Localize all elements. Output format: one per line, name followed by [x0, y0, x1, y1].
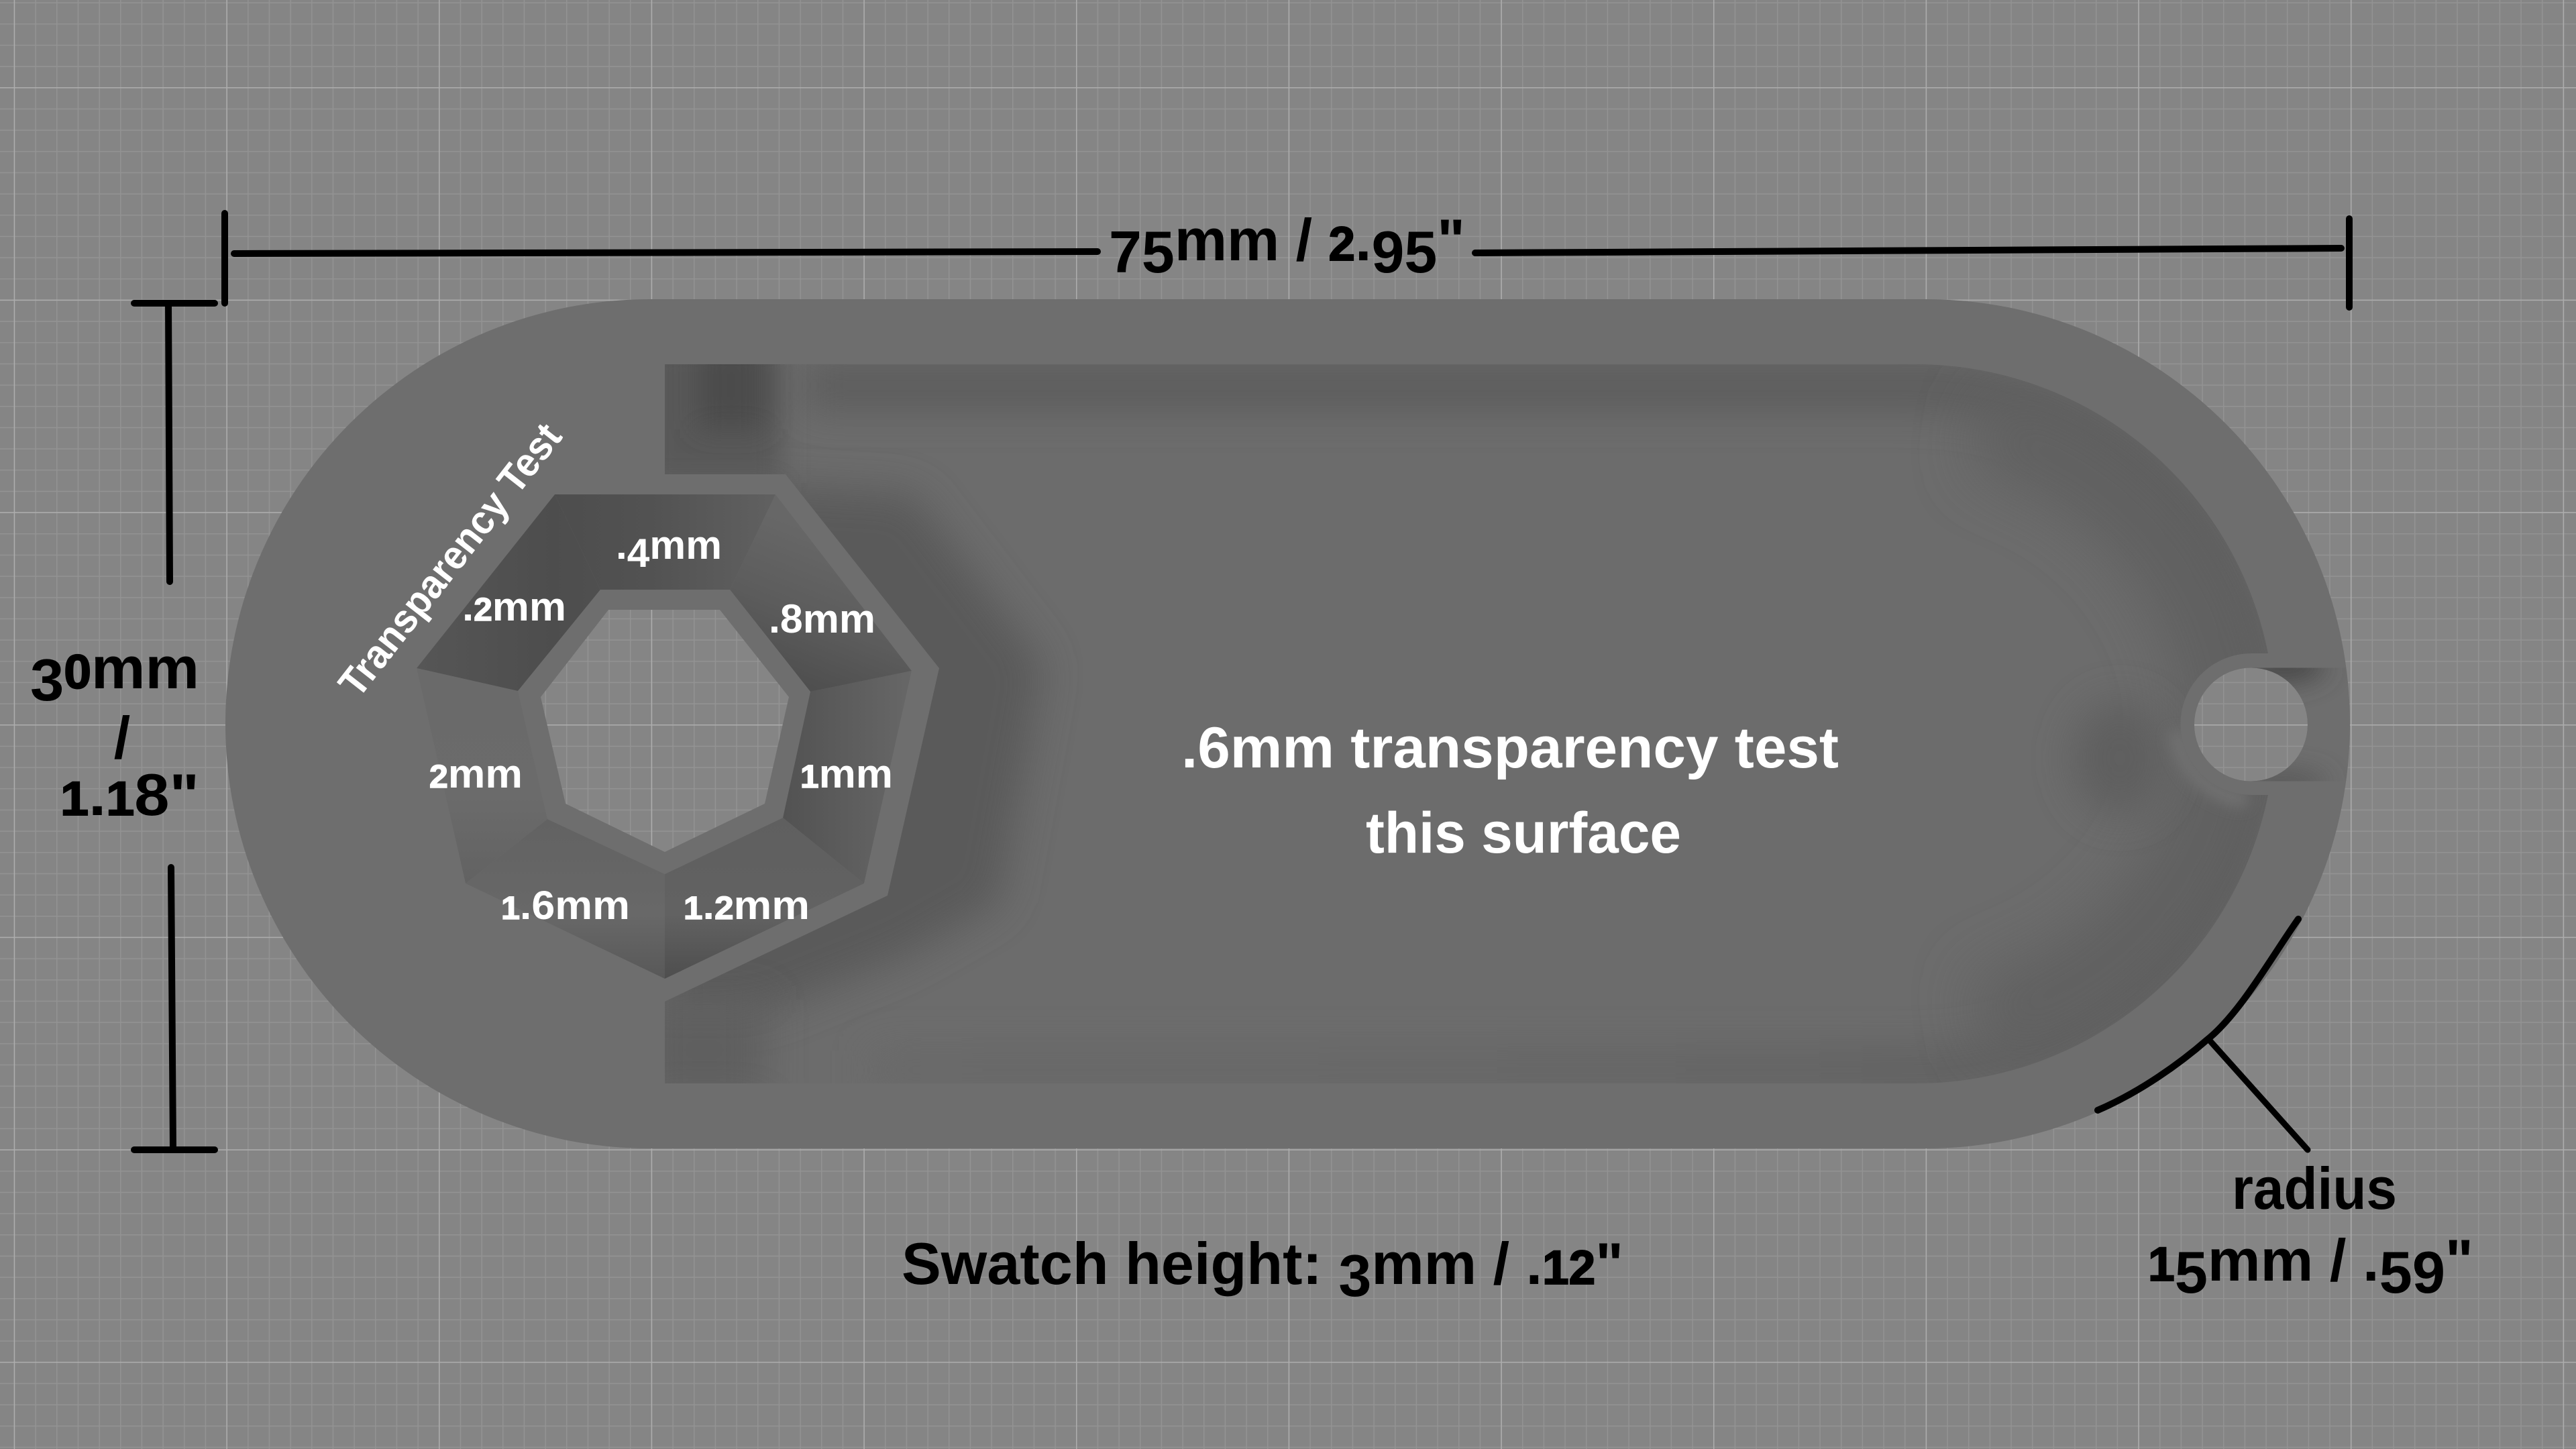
radius label line 1: radius: [2232, 1155, 2397, 1222]
height label line 2: 1.18": [60, 761, 199, 828]
shade left of key ring: [2080, 711, 2153, 805]
width label: 75: [1109, 219, 1175, 285]
width label: mm /: [1175, 207, 1329, 273]
label .8mm: .8mm: [769, 596, 875, 641]
top and right soft shadow: [810, 364, 2014, 412]
swatch height note: mm / .: [1371, 1230, 1542, 1297]
radius label line 2: 1: [2148, 1238, 2175, 1291]
label .4mm: 4: [627, 531, 650, 576]
wedge labels: [429, 523, 893, 928]
wedge .2mm: [417, 494, 600, 691]
radius arc: [2098, 919, 2298, 1110]
label .2mm: .2mm: [462, 584, 566, 629]
main recessed surface: [644, 342, 2268, 1100]
dimension: overall width: [225, 207, 2349, 307]
swatch height note: 12": [1542, 1230, 1623, 1297]
swatch height note: 3: [1338, 1242, 1371, 1309]
label .4mm: .: [616, 523, 627, 568]
stadium outline with see-through holes: [225, 299, 2350, 1148]
radius callout: [2098, 919, 2473, 1305]
radius label line 2: 5: [2175, 1239, 2208, 1305]
height label line 1: 3: [30, 647, 64, 713]
rotated heading: Transparency Test: Transparency Test: [329, 415, 570, 705]
radius label line 2: 59: [2379, 1239, 2445, 1305]
wedge 1.2mm: [665, 818, 864, 979]
wide shade along the right arc: [2000, 447, 2208, 1014]
width label: ": [1437, 207, 1465, 273]
width label: 2.: [1329, 207, 1371, 273]
label 1mm: 1mm: [800, 751, 893, 796]
height label slash: /: [114, 704, 130, 771]
height line and caps: [134, 303, 215, 1150]
width ticks and line: [225, 213, 2349, 307]
wedge 1.6mm: [466, 819, 665, 979]
bottom soft shadow: [1863, 1055, 1986, 1081]
swatch height note: Swatch height:: [902, 1230, 1322, 1297]
bottom left corner shade: [665, 1020, 762, 1083]
radius leader line: [2209, 1040, 2308, 1150]
width label: 95: [1371, 219, 1437, 285]
label 2mm: 2mm: [429, 751, 523, 796]
light fringe beside key ring: [2177, 731, 2247, 800]
swatch body: [225, 299, 2355, 1148]
transparency test wedges: [417, 494, 912, 979]
top left corner darkest patch: [700, 364, 765, 428]
centre note: [1181, 716, 1839, 865]
note line 1: .6mm transparency test: [1181, 716, 1839, 780]
wedge .4mm: [555, 494, 775, 590]
label 1.6mm: 1.6mm: [501, 883, 630, 928]
wedge .8mm: [730, 494, 912, 692]
radius label line 2: mm / .: [2208, 1227, 2379, 1293]
top left corner shade: [665, 364, 785, 474]
dimension: overall height: [30, 303, 215, 1150]
label .4mm: mm: [649, 523, 722, 568]
keyring channel: [2234, 649, 2355, 794]
height label line 1: 0: [64, 646, 91, 699]
wedge 1mm: [783, 671, 912, 883]
height label line 1: mm: [91, 635, 196, 701]
note line 2: this surface: [1366, 801, 1681, 865]
wedge 2mm: [417, 668, 547, 883]
radius label line 2: ": [2445, 1227, 2473, 1293]
label 1.2mm: 1.2mm: [684, 883, 810, 928]
shadow around the octagon wall: [665, 483, 1043, 1020]
